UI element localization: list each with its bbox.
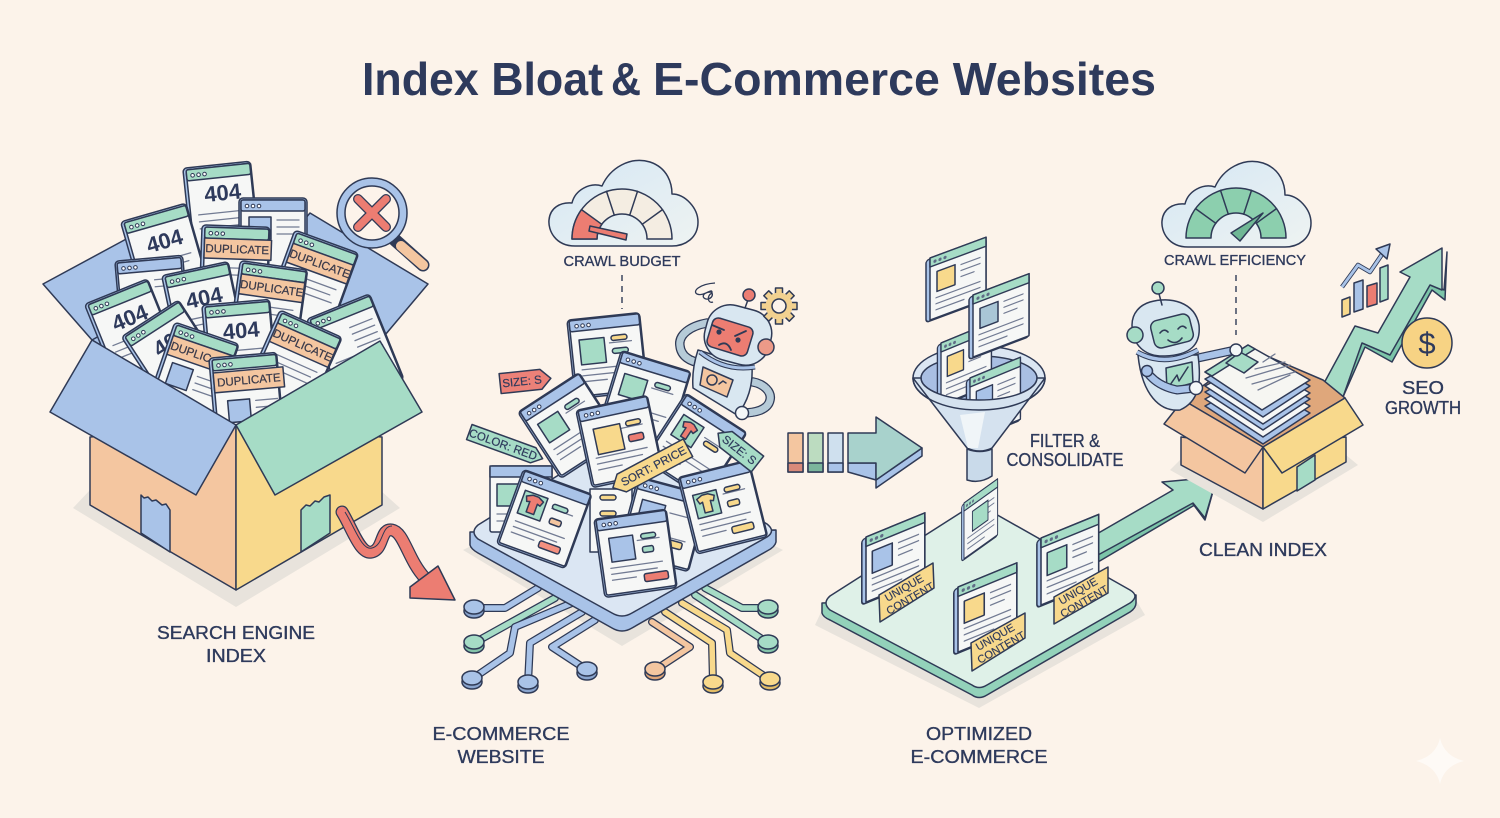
label: optimized e-commerce: E-COMMERCE [910,747,1048,767]
product page hidden right [618,477,709,572]
platform top [474,439,772,616]
product page hidden mid [590,489,632,552]
icon: gear [761,288,797,324]
page in funnel back [937,322,991,407]
product page with shirt by robot [643,393,747,499]
robot ear [758,339,774,355]
illustration: optimized platform with unique pages [815,479,1145,708]
unique content label a: UNIQUE [883,573,926,605]
box left face [1181,437,1263,509]
label: filter and consolidate: CONSOLIDATE [1006,450,1124,470]
tag: color red: COLOR: RED [467,427,538,463]
robot head [699,299,777,371]
gauge [572,189,672,240]
angry robot [680,289,777,420]
robot arms [680,323,770,413]
platform side [822,595,1136,698]
title: & [611,53,641,105]
box interior [1183,350,1345,447]
happy robot [1127,282,1242,410]
page: 404 left low: 404 [108,299,152,336]
title [362,53,1156,105]
page: 404 left: 404 [143,224,186,258]
icon: magnifying glass with cross [337,178,423,265]
panel: crawl efficiency gauge cloud [1162,161,1311,269]
page c [954,563,1017,655]
page: blank blue [239,198,307,290]
funnel rim back [913,346,1045,410]
arrow: transition bars and arrow [788,417,922,488]
product page top [567,313,648,399]
tag: size s green [712,425,764,472]
page b [962,479,998,561]
label: optimized e-commerce [910,724,1048,767]
page: duplicate top: DUPLICATE [205,243,270,257]
page: 404 center: 404 [184,282,225,314]
page: 404 left [121,203,211,310]
label: e-commerce website: WEBSITE [458,747,544,767]
robot face [1149,313,1195,349]
page pile: messy product pages [490,283,797,598]
product page far left [490,466,552,532]
cloud [549,160,698,246]
unique content label d: UNIQUE [1057,576,1100,608]
unique content label c: UNIQUE [974,622,1017,654]
box right flap [1263,398,1363,473]
label: filter and consolidate [1006,431,1124,470]
box back flaps [43,213,428,425]
cloud [1162,161,1311,247]
box left flap [1164,400,1263,473]
illustration: funnel with pages [913,237,1045,481]
arrow: seo growth arrow [1323,248,1447,397]
product page center yellow [576,395,664,488]
unique content label c: CONTENT [975,629,1028,667]
title: E-Commerce Websites [653,53,1156,105]
page: duplicate right low: DUPLICATE [271,328,334,365]
unique content label d [1052,567,1111,624]
front right flap [236,341,422,495]
icon: dollar coin: $ [1418,326,1436,361]
robot body [1138,355,1199,410]
page: duplicate center [228,261,308,361]
label: search engine index: INDEX [206,646,266,666]
panel: crawl budget gauge cloud: CRAWL BUDGET [564,253,680,270]
illustration: clean index box [1164,345,1363,522]
page: 404 middle low: 404 [222,316,261,344]
page stack [1205,345,1310,444]
page: plain right [306,294,404,405]
icon: dizzy squiggle [696,283,715,302]
label: search engine index: SEARCH ENGINE [157,623,315,643]
robot head [1132,300,1199,356]
page: 404 top: 404 [203,178,243,207]
label: seo growth: SEO [1402,378,1444,398]
unique content label d: CONTENT [1058,583,1111,621]
robot body [693,350,752,415]
box tape [1297,455,1315,491]
tag: sort price: SORT: PRICE [619,445,689,489]
page: duplicate top [199,225,272,319]
robot face [706,317,754,357]
page: 404 top [183,161,260,260]
page d [1037,514,1099,608]
label: e-commerce website: E-COMMERCE [432,724,570,744]
platform top [826,506,1135,688]
icon: dollar coin [1402,318,1452,368]
page: duplicate right: DUPLICATE [288,248,352,281]
product page red shirt [496,469,592,569]
right tape [301,495,330,552]
page: 404 left second: 404 [149,320,194,362]
arrow: red squiggle [342,512,455,600]
robot upper arm [1198,350,1235,358]
gauge [1186,188,1286,241]
page: 404 center [162,262,247,366]
robot panel [1166,362,1193,390]
robot antenna [1152,282,1164,305]
label: seo growth [1385,378,1461,418]
robot ear [1127,327,1143,343]
page: blue behind [115,255,191,353]
unique content label c [969,613,1028,671]
box right face [1263,437,1346,509]
circuit traces [472,588,770,683]
platform side [470,530,776,631]
page: duplicate center: DUPLICATE [239,279,304,300]
page: duplicate right low [243,310,342,422]
tag: size s red: SIZE: S [502,374,543,390]
page: 404 left second [121,300,229,414]
page: 404 left low [84,279,182,390]
left tape [141,495,170,552]
unique content label a [878,563,937,622]
circuit pads [462,600,780,693]
product page yellow shirt [678,460,768,554]
box left face [90,425,236,590]
product page left [518,372,622,479]
unique content label a: CONTENT [884,580,937,618]
robot front arm [1147,372,1195,390]
label: e-commerce website [432,724,570,767]
page above funnel one [926,237,986,322]
tag: size s red [499,368,552,394]
robot antenna [743,289,755,308]
title: Index Bloat [362,53,603,105]
panel: crawl efficiency gauge cloud: CRAWL EFFICIENCY [1164,252,1306,269]
page: duplicate front [209,352,290,450]
label: search engine index [157,623,315,666]
label: filter and consolidate: FILTER & [1030,431,1100,451]
page: duplicate front: DUPLICATE [217,372,282,390]
page above funnel two [969,274,1029,360]
product page upper right [598,350,691,447]
page a [862,513,925,605]
panel: crawl budget gauge cloud [549,160,698,270]
page: duplicate right [263,230,359,340]
robot chest panel [700,367,733,397]
product page front [594,509,677,598]
funnel spout [967,449,992,481]
label: seo growth: GROWTH [1385,398,1461,418]
icon: sparkle watermark [1416,738,1464,784]
tag: size s green: SIZE: S [719,434,758,468]
illustration: e-commerce website circuit base [462,439,783,693]
chart: growth bars and trend [1342,244,1390,317]
tag: sort price [608,439,693,497]
funnel cone [913,378,1045,451]
page in funnel front [966,357,1020,442]
arrow: green arrow to clean index [1095,477,1217,562]
page: 404 middle low [202,299,278,397]
box right face [236,425,382,590]
label: optimized e-commerce: OPTIMIZED [926,724,1032,744]
page: duplicate partial: DUPLIC [169,340,213,366]
front left flap [50,340,236,495]
illustration: overflowing search engine index box [43,161,428,607]
label: clean index: CLEAN INDEX [1199,540,1327,560]
page: duplicate partial [145,322,239,431]
